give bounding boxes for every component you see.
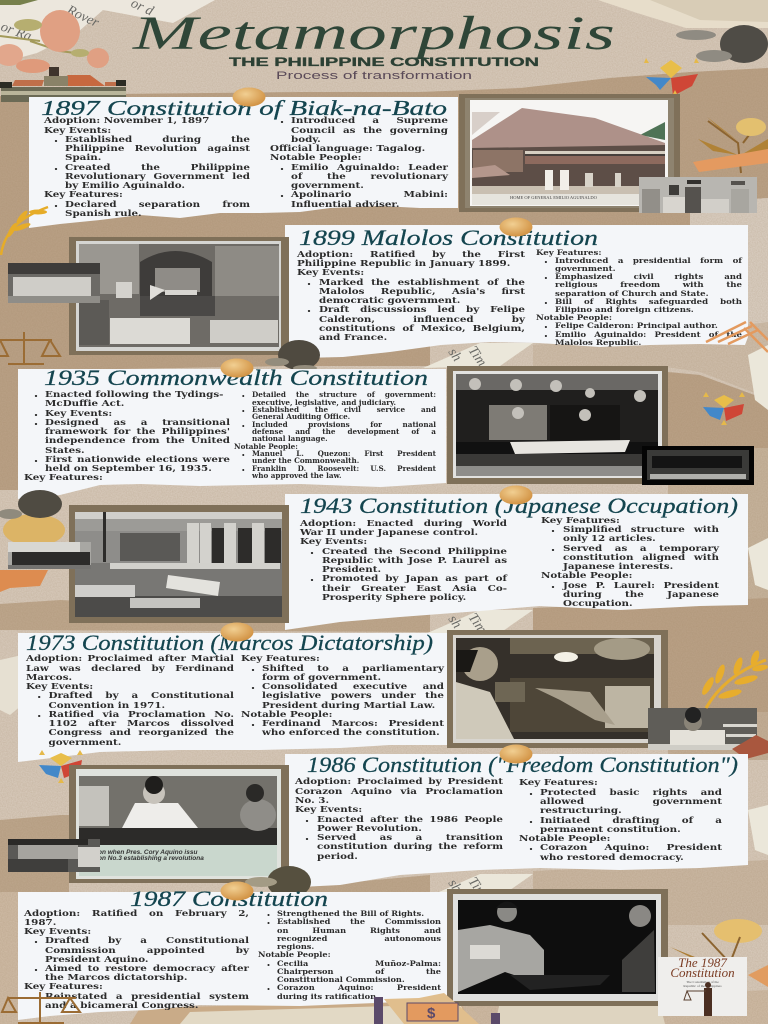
icon: heritage building — [0, 67, 126, 102]
text: 1973 left column: Marcos. — [26, 673, 72, 683]
text: 1943 left column: Republic with Jose P. Laurel as — [322, 556, 507, 566]
text: 1935 left column: First nationwide elections were — [45, 455, 230, 465]
text: 1897 left column: Established during the — [65, 135, 250, 145]
text: 1987 right column: Established the Commission — [277, 917, 441, 926]
text: 1986 left column: No. 3. — [295, 796, 329, 806]
text: 1987 right column: Corazon Aquino: President — [277, 983, 441, 992]
text: 1897 left column: Created the Philippine — [65, 163, 250, 173]
text: 1897 left column: Key Features: — [44, 190, 123, 200]
text: 1899 left column: democratic government. — [319, 296, 460, 306]
text: 1943 left column: War II under Japanese control. — [300, 528, 478, 538]
text: 1899 right column — [536, 248, 742, 347]
text: 1943 right column: Served as a temporary — [563, 544, 719, 554]
icon: orange stripes — [706, 320, 768, 353]
text: 1986 left column: Power Revolution. — [317, 824, 422, 834]
text: 1935 left column: Designed as a transitional — [45, 418, 230, 428]
text: 1899 left column: Malolos Republic, Asia's first — [319, 287, 525, 297]
text: 1899 left column: Calderon, influenced by — [319, 315, 525, 325]
photo: Aquino 1987 handover in frame — [447, 889, 668, 1006]
text: 1935 left column: held on September 16, 1935. — [45, 464, 212, 474]
photo: small delegates group — [8, 263, 100, 303]
text: 1987 right column: during its ratification. — [277, 992, 379, 1001]
text: 1986 left column: Corazon Aquino via Proclamation — [295, 787, 503, 797]
text: 1943 right column — [541, 516, 720, 609]
text: 1986 right column: allowed government — [540, 797, 722, 807]
icon: brass scales — [0, 332, 62, 365]
text: 1943 right column: only 12 articles. — [563, 534, 656, 544]
photo: small signing scene — [642, 446, 754, 485]
heading: 1943 title: 1943 Constitution (Japanese Occupation) — [300, 493, 738, 518]
text: 1899 right column: Key Features: — [536, 248, 602, 257]
text: 1987 right column — [258, 910, 441, 1001]
text: 1987 right column: recognized autonomous — [277, 934, 441, 943]
text: 1899 left column: Philippine Republic in January 1899. — [297, 259, 510, 269]
book cover: The 1987 Constitution — [658, 957, 747, 1016]
icon: moth and yellow flowers left — [0, 490, 65, 592]
text: 1943 right column: constitution aligned with — [563, 553, 719, 563]
text: 1987 left column: Drafted by a Constitutional — [45, 936, 249, 946]
text: 1897 right column: of the revolutionary — [291, 172, 448, 182]
text: 1987 left column: 1987. — [24, 918, 56, 928]
text: 1973 right column — [241, 654, 444, 738]
heading: 1935 title: 1935 Commonwealth Constitution — [44, 365, 428, 390]
book cover: The 1987 Constitution: Constitution — [670, 965, 735, 980]
text: 1943 left column: Created the Second Philippine — [322, 547, 507, 557]
icon: brass scales lower left — [2, 990, 80, 1024]
text: 1973 left column: Congress and reorganized the — [48, 728, 234, 738]
text: 1973 right column: Shifted to a parliamentary — [262, 664, 444, 674]
icon: rust tape — [732, 735, 768, 759]
text: 1986 right column: Key Features: — [519, 778, 598, 788]
text: 1987 left column: Reinstated a presidential system — [45, 992, 249, 1002]
text: 1986 right column: Notable People: — [519, 834, 610, 844]
text: 1973 left column: Drafted by a Constitutional — [48, 691, 234, 701]
text: 1935 left column: Key Events: — [45, 409, 112, 419]
text: 1935 right column: General Auditing Office. — [252, 412, 350, 421]
text: 1943 left column: Key Events: — [300, 537, 367, 547]
text: 1943 left column: Prosperity Sphere policy. — [322, 593, 466, 603]
text: 1943 right column: Notable People: — [541, 571, 632, 581]
text: 1943 right column: Key Features: — [541, 516, 620, 526]
icon: dried flowers lower right — [668, 915, 768, 990]
icon: moth centre — [265, 340, 320, 369]
icon: Philippine flag sun top right — [644, 58, 699, 94]
text: 1987 right column: Strengthened the Bill of Rights. — [277, 909, 424, 918]
photo: Cory Aquino press conference in frame — [69, 765, 289, 883]
text: 1935 right column: Included provisions for national — [252, 420, 436, 429]
text: 1899 left column: and France. — [319, 333, 387, 343]
photo: Cory Aquino press conference in frame: on when Pres. Cory Aquino issu — [98, 849, 197, 856]
photo: Aguinaldo house in frame — [459, 94, 680, 212]
text: 1899 right column: Notable People: — [536, 313, 612, 322]
subtitle: The Philippine Constitution: THE PHILIPPINE CONSTITUTION — [229, 57, 539, 69]
text: 1935 left column: Key Features: — [24, 473, 103, 483]
text: 1987 left column: Key Features: — [24, 982, 103, 992]
text: 1973 right column: Key Features: — [241, 654, 320, 664]
heading: 1973 title: 1973 Constitution (Marcos Dictatorship) — [26, 630, 433, 655]
text: 1987 right column: on Human Rights and — [277, 926, 441, 935]
text: 1935 right column: executive, legislative, and judiciary. — [252, 398, 396, 407]
text: 1986 right column: Protected basic rights and — [540, 788, 722, 798]
text: 1943 left column — [300, 519, 508, 603]
panel: 1986 Constitution — [285, 754, 748, 891]
text: 1986 right column: permanent constitution. — [540, 825, 681, 835]
panel: 1935 Constitution — [18, 365, 446, 499]
text: 1973 left column: 1102 after Marcos dissolved — [48, 719, 234, 729]
icon: yellow leaf right — [702, 650, 768, 709]
text: 1987 left column: Adoption: Ratified on February 2, — [24, 909, 249, 919]
heading: 1897 title: 1897 Constitution of Biak-na-Bato — [41, 96, 447, 120]
text: 1986 left column: Enacted after the 1986 People — [317, 815, 503, 825]
text: 1897 right column: Emilio Aguinaldo: Leader — [291, 163, 448, 173]
icon: moth lower centre — [245, 866, 317, 902]
text: 1943 right column: Jose P. Laurel: President — [563, 581, 719, 591]
text: 1973 right column: Consolidated executive and — [262, 682, 444, 692]
text: 1897 right column: body. — [291, 135, 321, 145]
text: 1986 left column: constitution during the reform — [317, 842, 503, 852]
text: 1973 left column — [26, 654, 234, 748]
text: 1899 right column: separation of Church and State. — [555, 289, 709, 298]
text: 1987 left column: President Aquino. — [45, 955, 149, 965]
text: 1943 left column: Promoted by Japan as part of — [322, 574, 507, 584]
photo: Cory Aquino press conference in frame: on No.3 establishing a revolutiona — [98, 855, 204, 862]
text: 1935 left column: independence from the United — [45, 436, 230, 446]
decoration: newspaper scraps and old book: sh — [445, 346, 464, 364]
text: 1987 left column — [24, 910, 249, 1011]
heading: 1986 title: 1986 Constitution ("Freedom Constitution") — [307, 752, 738, 777]
text: 1987 left column: Commission appointed by — [45, 946, 249, 956]
icon: Philippine flag sun middle — [703, 392, 745, 425]
text: 1899 left column — [296, 250, 526, 343]
text: 1935 right column — [234, 390, 436, 480]
text: 1943 right column: Japanese interests. — [563, 562, 673, 572]
text: 1935 right column: national language. — [252, 434, 328, 443]
text: 1899 right column: Bill of Rights safeguarded both — [555, 297, 742, 306]
photo: small portrait of Marcos — [648, 707, 757, 750]
text: 1897 left column: Spanish rule. — [65, 209, 142, 219]
icon: hand holding money: $ — [427, 1005, 436, 1022]
icon: hand holding money — [374, 993, 500, 1024]
text: 1899 right column: government. — [555, 264, 616, 273]
text: 1973 right column: Ferdinand Marcos: President — [262, 719, 444, 729]
text: 1973 right column: President during Martial Law. — [262, 701, 435, 711]
text: 1899 right column: Emilio Aguinaldo: President of the — [555, 330, 742, 339]
text: 1973 left column: Adoption: Proclaimed after Martial — [26, 654, 234, 664]
decoration: newspaper scraps and old book: Tim — [465, 344, 489, 370]
icon: yellow wheat leaf — [0, 206, 48, 256]
text: 1943 right column: Occupation. — [563, 599, 633, 609]
text: 1935 right column: Detailed the structure of government: — [252, 390, 436, 399]
text: 1973 left column: Key Events: — [26, 682, 93, 692]
text: 1897 right column: Apolinario Mabini: — [291, 190, 448, 200]
text: 1987 right column: Chairperson of the — [277, 967, 441, 976]
text: 1899 right column: Introduced a presidential form of — [555, 256, 742, 265]
text: 1935 right column: under the Commonwealth. — [252, 456, 359, 465]
panel: 1973 Constitution — [18, 630, 447, 762]
text: 1897 right column: Council as the governing — [291, 126, 448, 136]
text: 1987 right column: Cecilia Muñoz-Palma: — [277, 959, 441, 968]
text: 1897 left column: Key Events: — [44, 126, 111, 136]
panel: 1897 Constitution — [29, 96, 458, 228]
heading: 1987 title: 1987 Constitution — [130, 886, 328, 911]
text: 1935 left column: Enacted following the Tydings- — [45, 390, 223, 400]
text: 1935 left column — [24, 390, 230, 483]
text: 1935 right column: Manuel L. Quezon: First President — [252, 449, 436, 458]
photo: Malolos Congress in frame — [69, 237, 289, 355]
text: 1899 right column: Felipe Calderon: Principal author. — [555, 321, 718, 330]
text: 1935 right column: defense and the development of a — [252, 427, 436, 436]
text: 1897 left column: Revolutionary Government led — [65, 172, 250, 182]
text: 1987 right column: regions. — [277, 942, 314, 951]
text: 1987 left column: the Marcos dictatorship. — [45, 973, 187, 983]
text: 1935 right column: Franklin D. Roosevelt: U.S. President — [252, 464, 436, 473]
text: 1943 right column: Simplified structure with — [563, 525, 719, 535]
title: Metamorphosis: Metamorphosis — [131, 7, 615, 60]
text: 1986 left column: period. — [317, 852, 358, 862]
heading: 1899 title: 1899 Malolos Constitution — [299, 225, 598, 250]
text: 1973 left column: Law was declared by Ferdinand — [26, 664, 234, 674]
text: 1973 left column: Ratified via Proclamation No. — [48, 710, 234, 720]
text: 1899 right column: Filipino and foreign citizens. — [555, 305, 694, 314]
book cover: The 1987 Constitution: Republic of the Philippines — [683, 984, 722, 988]
text: 1899 right column: Malolos Republic. — [555, 338, 641, 347]
text: 1899 left column: Draft discussions led by Felipe — [319, 305, 525, 315]
panel: 1987 Constitution — [18, 892, 448, 1020]
photo: Aguinaldo house in frame: HOME OF GENERAL EMILIO AGUINALDO — [510, 195, 598, 200]
text: 1897 right column — [270, 116, 448, 210]
text: 1897 right column: Official language: Tagalog. — [270, 144, 425, 154]
icon: dried flower with tape — [693, 118, 768, 174]
text: 1899 right column: religious freedom with the — [555, 280, 742, 289]
text: 1973 right column: who enforced the constitution. — [262, 728, 440, 738]
text: 1899 left column: Marked the establishment of the — [319, 278, 525, 288]
text: 1986 left column: Adoption: Proclaimed by President — [295, 777, 503, 787]
text: 1986 left column: Served as a transition — [317, 833, 503, 843]
book cover: The 1987 Constitution: The Constitution of the — [686, 980, 719, 984]
text: 1935 right column: Notable People: — [234, 442, 298, 451]
text: 1897 left column: Declared separation from — [65, 200, 250, 210]
photo: small revolutionaries group — [639, 177, 757, 213]
icon: Philippine flag sun left — [36, 748, 86, 784]
photo: Legislative building rally in frame — [69, 505, 289, 623]
tagline: Process of transformation: Process of transformation — [276, 70, 472, 82]
text: 1897 left column: by Emilio Aguinaldo. — [65, 181, 185, 191]
text: 1943 right column: during the Japanese — [563, 590, 719, 600]
text: 1986 right column: who restored democracy. — [540, 853, 684, 863]
text: 1935 left column: McDuffie Act. — [45, 399, 124, 409]
photo: Marcos at press microphones in frame — [447, 630, 668, 748]
text: 1987 right column: Constitutional Commission. — [277, 975, 405, 984]
text: 1897 right column: government. — [291, 181, 364, 191]
text: 1986 right column: Initiated drafting of a — [540, 816, 722, 826]
text: 1935 left column: framework for the Philippines' — [45, 427, 230, 437]
text: 1943 left column: President. — [322, 565, 381, 575]
text: 1897 left column: Philippine Revolution against — [65, 144, 250, 154]
text: 1973 right column: legislative powers under the — [262, 691, 444, 701]
text: 1987 left column: Key Events: — [24, 927, 91, 937]
text: 1899 right column: Emphasized civil rights and — [555, 272, 742, 281]
text: 1897 left column — [44, 116, 250, 219]
text: 1899 left column: Key Events: — [297, 268, 364, 278]
text: 1897 right column: Influential adviser. — [291, 200, 400, 210]
text: 1897 left column: Adoption: November 1, 1897 — [44, 116, 209, 126]
text: 1986 left column: Key Events: — [295, 805, 362, 815]
text: 1943 left column: Adoption: Enacted during World — [300, 519, 507, 529]
text: 1987 left column: Aimed to restore democracy after — [45, 964, 249, 974]
text: 1935 right column: who approved the law. — [252, 471, 342, 480]
photo: small crowd group — [8, 839, 100, 872]
text: 1973 right column: form of government. — [262, 673, 381, 683]
text: 1986 right column — [519, 779, 722, 863]
icon: salmon flower sprig — [0, 10, 109, 73]
icon: dark moth top right — [676, 25, 768, 63]
text: 1987 right column: Notable People: — [258, 950, 331, 959]
text: 1986 right column: Corazon Aquino: President — [540, 843, 722, 853]
photo: small line of officials — [8, 542, 91, 569]
panel: 1899 Constitution — [285, 225, 748, 358]
pins: gold push pins — [220, 85, 530, 905]
text: 1897 right column: Notable People: — [270, 153, 361, 163]
text: 1986 right column: restructuring. — [540, 806, 622, 816]
text: 1899 left column: constitutions of Mexico, Belgium, — [319, 324, 525, 334]
text: 1973 left column: Convention in 1971. — [48, 701, 165, 711]
text: 1935 right column: Established the civil service and — [252, 405, 436, 414]
text: 1986 left column — [295, 778, 503, 862]
decoration: newspaper scraps and old book: Rover — [63, 3, 101, 31]
text: 1935 left column: States. — [45, 446, 85, 456]
text: 1897 right column: Introduced a Supreme — [291, 116, 448, 126]
text: 1973 left column: government. — [48, 738, 121, 748]
text: 1973 right column: Notable People: — [241, 710, 332, 720]
text: 1943 left column: their Greater East Asia Co- — [322, 584, 507, 594]
photo: Commonwealth signing in frame — [447, 366, 668, 484]
panel: 1943 Constitution — [285, 493, 748, 630]
text: 1897 left column: Spain. — [65, 153, 101, 163]
text: 1899 left column: Adoption: Ratified by the First — [297, 250, 525, 260]
text: 1987 left column: and a bicameral Congress. — [45, 1001, 198, 1011]
